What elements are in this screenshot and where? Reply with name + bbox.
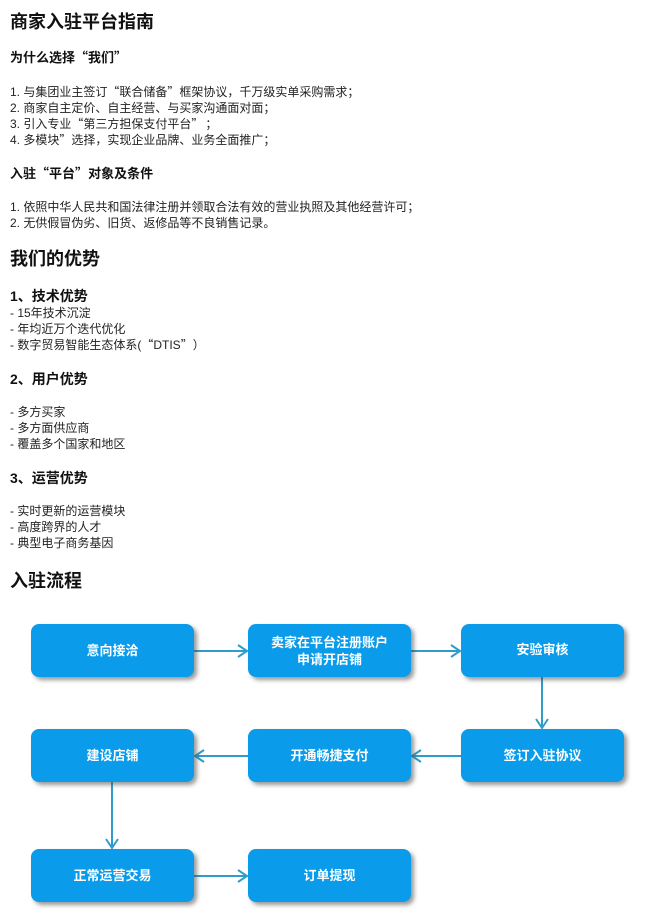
text block: user advantage list: - 多方面供应商 — [10, 421, 89, 435]
heading: technical advantage: 1、技术优势 — [10, 288, 88, 304]
step: enable payment: 开通畅捷支付 — [290, 748, 368, 763]
step: build store: 建设店铺 — [86, 748, 138, 763]
step: verification review: 安验审核 — [516, 642, 568, 656]
step: intent discussion — [31, 624, 194, 677]
heading: our advantages: 我们的优势 — [10, 249, 100, 269]
arrows: flow connectors — [105, 644, 549, 883]
step: sign agreement — [461, 729, 624, 782]
step: order withdrawal: 订单提现 — [303, 868, 356, 883]
text block: technical advantage list: - 15年技术沉淀 — [10, 306, 91, 320]
text block: reasons list: 1. 与集团业主签订“联合储备”框架协议，千万级实单采购需求； — [10, 83, 359, 100]
text block: operations advantage list: - 典型电子商务基因 — [10, 536, 113, 550]
step: normal trading: 正常运营交易 — [73, 868, 152, 883]
step: seller registration — [248, 624, 411, 677]
heading: platform eligibility: 入驻“平台”对象及条件 — [10, 163, 153, 182]
text block: technical advantage list: - 年均近万个迭代优化 — [10, 322, 125, 336]
flowchart: onboarding process — [31, 624, 630, 908]
step: build store — [31, 729, 194, 782]
step: order withdrawal — [248, 849, 411, 902]
text block: operations advantage list: - 高度跨界的人才 — [10, 520, 101, 534]
text block: technical advantage list — [10, 306, 205, 353]
heading: onboarding process: 入驻流程 — [10, 571, 82, 591]
heading: why choose us: 为什么选择“我们” — [10, 47, 127, 66]
title: merchant guide: 商家入驻平台指南 — [10, 12, 154, 32]
text block: operations advantage list: - 实时更新的运营模块 — [10, 504, 125, 518]
step: enable payment — [248, 729, 411, 782]
text block: reasons list: 4. 多模块”选择，实现企业品牌、业务全面推广； — [10, 131, 275, 148]
step: seller registration: 申请开店铺 — [297, 652, 362, 666]
text block: reasons list — [10, 83, 359, 148]
step: normal trading — [31, 849, 194, 902]
text block: reasons list: 2. 商家自主定价、自主经营、与买家沟通面对面； — [10, 101, 275, 115]
step: seller registration: 卖家在平台注册账户 — [271, 634, 388, 650]
text block: operations advantage list — [10, 504, 125, 550]
text block: user advantage list — [10, 405, 125, 451]
text block: eligibility list — [10, 200, 419, 230]
step: sign agreement: 签订入驻协议 — [503, 748, 582, 763]
step: verification review — [461, 624, 624, 677]
text block: user advantage list: - 覆盖多个国家和地区 — [10, 437, 125, 451]
heading: user advantage: 2、用户优势 — [10, 371, 88, 387]
text block: eligibility list: 2. 无供假冒伪劣、旧货、返修品等不良销售记录。 — [10, 216, 275, 230]
text block: technical advantage list: - 数字贸易智能生态体系(“DTIS”） — [10, 336, 205, 353]
text block: eligibility list: 1. 依照中华人民共和国法律注册并领取合法有效的营业执照及其他经营许可； — [10, 200, 419, 214]
heading: operations advantage: 3、运营优势 — [10, 470, 88, 486]
text block: reasons list: 3. 引入专业“第三方担保支付平台”； — [10, 115, 217, 132]
text block: user advantage list: - 多方买家 — [10, 405, 65, 419]
step: intent discussion: 意向接洽 — [86, 643, 138, 658]
